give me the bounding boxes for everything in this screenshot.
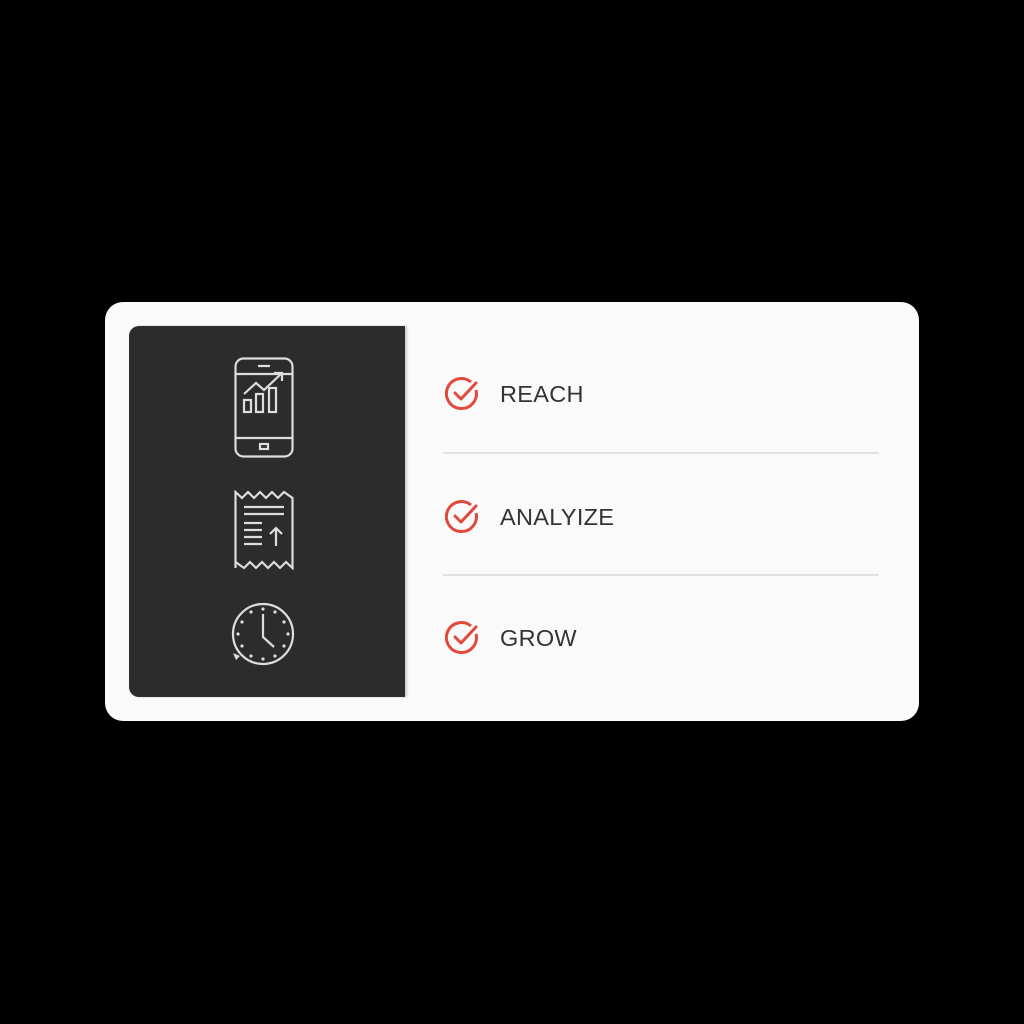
item: analyze: ANALYIZE: [500, 504, 614, 530]
item: reach: REACH: [500, 381, 584, 407]
item: grow: GROW: [500, 625, 577, 651]
icon: phone chart: [234, 357, 294, 458]
item: grow: [445, 621, 577, 654]
icon: check: [445, 377, 478, 410]
icon: check: [445, 500, 478, 533]
item: reach: [445, 377, 584, 410]
icon: receipt: [234, 490, 294, 570]
icon: check: [445, 621, 478, 654]
icon: clock: [232, 602, 294, 666]
item: analyze: [445, 500, 614, 533]
panel: icons: [129, 326, 405, 697]
card: [105, 302, 919, 721]
